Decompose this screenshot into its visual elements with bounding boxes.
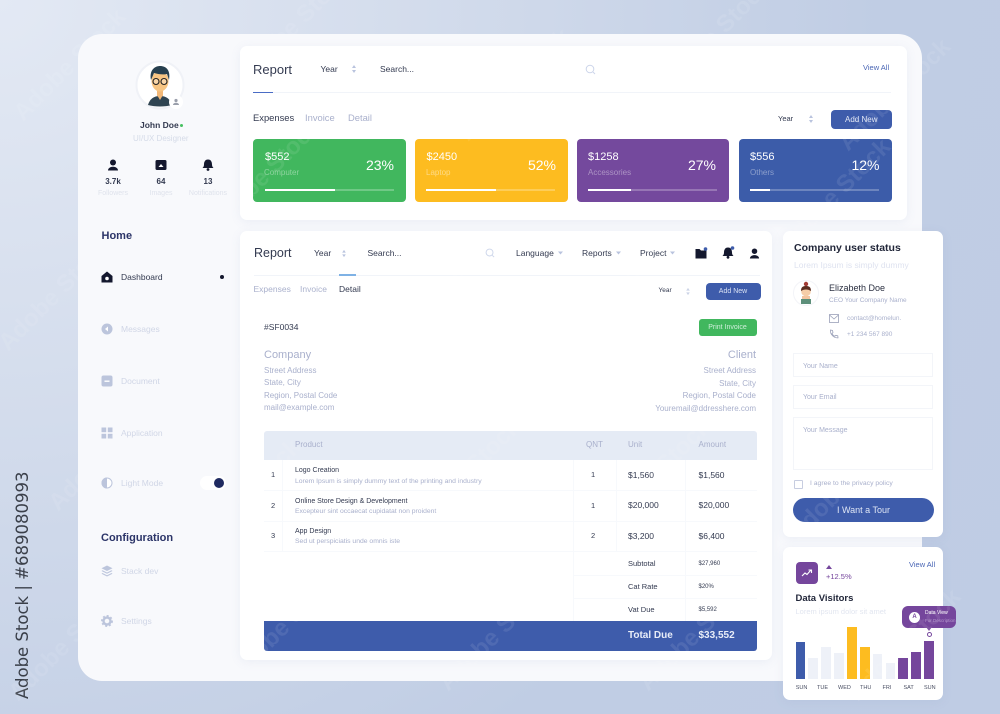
table header: Product: [295, 440, 323, 449]
row 2: 2: [271, 501, 275, 510]
icon: phone: [830, 330, 838, 338]
day labels: [796, 685, 936, 691]
summary: vat due: [628, 604, 717, 614]
main dashboard panel: [78, 34, 922, 681]
button: add new: [831, 110, 892, 128]
invoice number: #SF0034: [264, 322, 298, 332]
company address: Company: [264, 349, 311, 361]
row 2: $20,000: [698, 500, 729, 510]
stat card: accessories: Accessories: [588, 168, 631, 176]
tooltip: data view: [902, 606, 956, 628]
table header: Amount: [698, 440, 726, 449]
stat card: computer: Computer: [264, 168, 299, 176]
row 1: [271, 466, 724, 484]
tab underline: [339, 274, 356, 276]
input: name: [793, 353, 933, 377]
heading: configuration: Configuration: [101, 532, 173, 544]
client address: State, City: [719, 378, 756, 388]
tab: expenses: Expenses: [254, 284, 291, 294]
profile avatar: [148, 66, 179, 106]
icon: mail: [829, 314, 839, 323]
row 1: 1: [271, 470, 275, 479]
panel: expenses report: [240, 46, 907, 220]
watermark: Adobe Stock: [223, 253, 347, 376]
trend arrow: [826, 564, 832, 568]
row 3: $6,400: [698, 530, 724, 540]
client address: Street Address: [704, 366, 756, 374]
summary: subtotal: [628, 558, 720, 568]
day labels: TUE: [817, 685, 828, 691]
input: message: [793, 417, 933, 470]
stat: images: [150, 160, 172, 196]
search field: Search...: [368, 248, 402, 258]
button: add new: Add New: [719, 288, 747, 294]
row 3: [271, 528, 724, 545]
stat card: accessories: 27%: [688, 157, 716, 173]
summary: cat rate: [628, 582, 714, 590]
tab: invoice: Invoice: [305, 112, 335, 122]
user name: John Doe: [140, 120, 179, 130]
row 2: Excepteur sint occaecat cupidatat non proident: [295, 508, 436, 515]
stat: followers: [98, 160, 128, 196]
sidebar: [98, 66, 227, 627]
watermark: Adobe Stock: [813, 273, 937, 396]
watermark: Adobe Stock: [543, 243, 667, 366]
nav: settings: [101, 615, 152, 627]
subheading: Lorem Ipsum is simply dummy: [794, 260, 909, 270]
nav: application: [102, 428, 163, 438]
stat: followers: Followers: [98, 190, 128, 196]
icon: search: [586, 64, 596, 74]
company address: mail@example.com: [264, 403, 334, 412]
summary: vat due: $5,592: [698, 606, 717, 612]
stat: notifications: Notifications: [189, 190, 227, 196]
year select: Year: [314, 248, 331, 258]
user role: UI/UX Designer: [133, 134, 189, 143]
client address: [655, 349, 756, 412]
link: view all: View All: [863, 62, 889, 72]
nav: settings: Settings: [121, 616, 152, 626]
nav: stack dev: Stack dev: [121, 566, 158, 576]
invoice table: [264, 431, 757, 651]
bar chart: [796, 627, 936, 691]
contact email: contact@homelun.: [847, 315, 901, 322]
row 3: 3: [271, 531, 275, 540]
tab: invoice: Invoice: [300, 284, 327, 294]
input: name: Your Name: [803, 362, 838, 370]
trend value: +12.5%: [826, 572, 852, 580]
watermark: Adobe Stock: [183, 433, 307, 556]
row 3: App Design: [295, 528, 331, 534]
status dot: [180, 124, 183, 127]
watermark: Adobe Stock: [773, 133, 897, 256]
watermark: Adobe Stock: [453, 23, 577, 146]
stat card: others: 12%: [851, 157, 880, 173]
watermark: Adobe Stock: [633, 573, 757, 696]
year select right: Year: [658, 287, 672, 294]
stat card: laptop: [415, 138, 568, 202]
watermark: Adobe Stock: [403, 413, 527, 536]
nav: dashboard: Dashboard: [121, 272, 163, 282]
company address: State, City: [264, 378, 301, 387]
row 3: $3,200: [628, 530, 654, 540]
search field: Search...: [380, 64, 414, 74]
tab: expenses: Expenses: [253, 112, 294, 122]
stat card: laptop: 52%: [528, 157, 556, 173]
stat card: others: Others: [750, 168, 774, 176]
watermark: Adobe Stock: [3, 583, 127, 706]
summary: vat due: Vat Due: [628, 604, 655, 614]
row 2: Online Store Design & Development: [295, 498, 407, 504]
day labels: SAT: [904, 685, 914, 691]
table header: Unit: [628, 440, 642, 449]
button: i want a tour: [793, 498, 934, 522]
year chevrons right: [809, 115, 813, 123]
tooltip: data view: A: [912, 614, 917, 620]
panel: company user status: [783, 231, 943, 537]
total due bar: [264, 621, 757, 651]
button: i want a tour: I Want a Tour: [837, 505, 890, 515]
stat card: others: $556: [750, 151, 774, 163]
contact phone: +1 234 567 890: [847, 330, 892, 338]
client address: Client: [728, 349, 756, 361]
summary: subtotal: $27,960: [698, 560, 720, 566]
tooltip: data view: Data View: [925, 610, 948, 616]
tooltip: data view: For Description: [925, 618, 956, 623]
button: add new: Add New: [845, 114, 877, 124]
nav: messages: Messages: [121, 324, 160, 334]
nav: application: Application: [121, 428, 163, 438]
nav: messages: [102, 324, 160, 334]
heading: Company user status: [794, 242, 901, 254]
row 1: Logo Creation: [295, 466, 339, 474]
tab: detail: Detail: [348, 112, 372, 122]
nav: dashboard: [102, 272, 224, 282]
day labels: SUN: [796, 685, 807, 691]
table header: [264, 431, 757, 460]
vertical stock id: Adobe Stock | #689080993: [12, 472, 31, 699]
input: message: Your Message: [803, 426, 848, 434]
icon: trend: [796, 562, 818, 584]
toggle: [200, 476, 226, 490]
menu: reports: Reports: [582, 248, 612, 258]
nav: document: [102, 376, 160, 386]
link: view all: View All: [909, 560, 935, 569]
watermark: Adobe Stock: [593, 413, 717, 536]
menu arrows: [558, 252, 675, 254]
stat card: laptop: $2450: [426, 151, 457, 163]
year select right: Year: [778, 114, 793, 123]
row 1: 1: [591, 470, 595, 479]
client address: Region, Postal Code: [683, 391, 756, 400]
heading: report: Report: [253, 62, 292, 76]
year chevrons: [352, 65, 356, 73]
summary: cat rate: Cat Rate: [628, 582, 658, 590]
stat card: laptop: Laptop: [426, 168, 450, 176]
heading: home: Home: [102, 230, 132, 242]
chart title: Data Visitors: [796, 592, 853, 604]
row 2: 1: [591, 501, 595, 510]
nav: light mode: [102, 478, 224, 488]
nav: document: Document: [121, 376, 160, 386]
tab underline: [253, 92, 273, 93]
stat: followers: 3.7k: [105, 177, 121, 186]
stat card: others: [739, 138, 892, 202]
contact name: Elizabeth Doe: [829, 282, 885, 292]
day labels: WED: [838, 685, 851, 691]
heading: report: Report: [254, 246, 292, 260]
stat: notifications: [189, 160, 227, 196]
day labels: THU: [860, 685, 871, 691]
input: email: [793, 385, 933, 409]
watermark: Adobe Stock: [203, 113, 327, 236]
panel: data visitors: [783, 547, 943, 700]
button: print invoice: Print Invoice: [708, 324, 747, 331]
summary: cat rate: $20%: [698, 584, 714, 590]
day labels: SUN: [924, 685, 936, 691]
button: add new: [706, 282, 760, 300]
checkbox: [794, 480, 803, 489]
watermark: Adobe Stock: [433, 573, 557, 696]
stat: notifications: 13: [204, 177, 212, 186]
avatar: elizabeth: [793, 280, 819, 306]
stat card: computer: [253, 138, 406, 202]
year select: Year: [320, 64, 338, 74]
summary: subtotal: Subtotal: [628, 558, 656, 568]
client address: Youremail@ddresshere.com: [655, 404, 756, 412]
panel: invoice detail: [240, 231, 772, 660]
year chevrons: [342, 250, 346, 257]
watermark: Adobe Stock: [353, 263, 477, 386]
stat: images: Images: [150, 190, 172, 196]
contact title: CEO Your Company Name: [829, 296, 907, 304]
row 3: Sed ut perspiciatis unde omnis iste: [295, 538, 400, 545]
row 1: $1,560: [628, 470, 654, 480]
total due bar: $33,552: [698, 630, 735, 641]
company address: Region, Postal Code: [264, 391, 337, 400]
input: email: Your Email: [803, 394, 837, 401]
nav: stack dev: [102, 566, 158, 576]
year chevrons right: [686, 288, 690, 295]
chart subtitle: Lorem ipsum dolor sit amet: [796, 606, 886, 616]
row 1: Lorem Ipsum is simply dummy text of the printing and industry: [295, 478, 482, 484]
stat card: computer: 23%: [366, 157, 394, 173]
stat card: accessories: $1258: [588, 151, 619, 163]
icon: bell: [722, 246, 734, 259]
button: print invoice: [698, 319, 756, 336]
table header: QNT: [586, 440, 603, 449]
privacy label: I agree to the privacy policy: [810, 480, 893, 487]
watermark: Adobe Stock: [8, 3, 132, 126]
day labels: FRI: [882, 685, 891, 691]
row 3: 2: [591, 531, 595, 540]
tab: detail: Detail: [339, 284, 361, 294]
marker on last bar: [926, 632, 932, 637]
watermark: Adobe Stock: [833, 33, 957, 156]
menu: project: Project: [640, 248, 666, 258]
watermark: Adobe Stock: [223, 563, 347, 686]
stat card: computer: $552: [265, 151, 289, 163]
icon: search: [486, 248, 494, 258]
company address: [264, 349, 337, 412]
watermark: Adobe Stock: [43, 393, 167, 516]
watermark: Adobe Stock: [843, 583, 967, 706]
icon: folder: [696, 247, 708, 258]
row 1: $1,560: [698, 470, 724, 480]
total due bar: Total Due: [628, 630, 673, 641]
row 2: [271, 498, 729, 515]
stat: images: 64: [157, 177, 165, 186]
row 2: $20,000: [628, 500, 659, 510]
menu: language: Language: [516, 248, 554, 258]
company address: Street Address: [264, 366, 316, 374]
watermark: Adobe Stock: [783, 423, 907, 546]
nav: light mode: Light Mode: [121, 478, 163, 488]
stat card: accessories: [577, 138, 729, 202]
icon: user: [750, 248, 760, 258]
